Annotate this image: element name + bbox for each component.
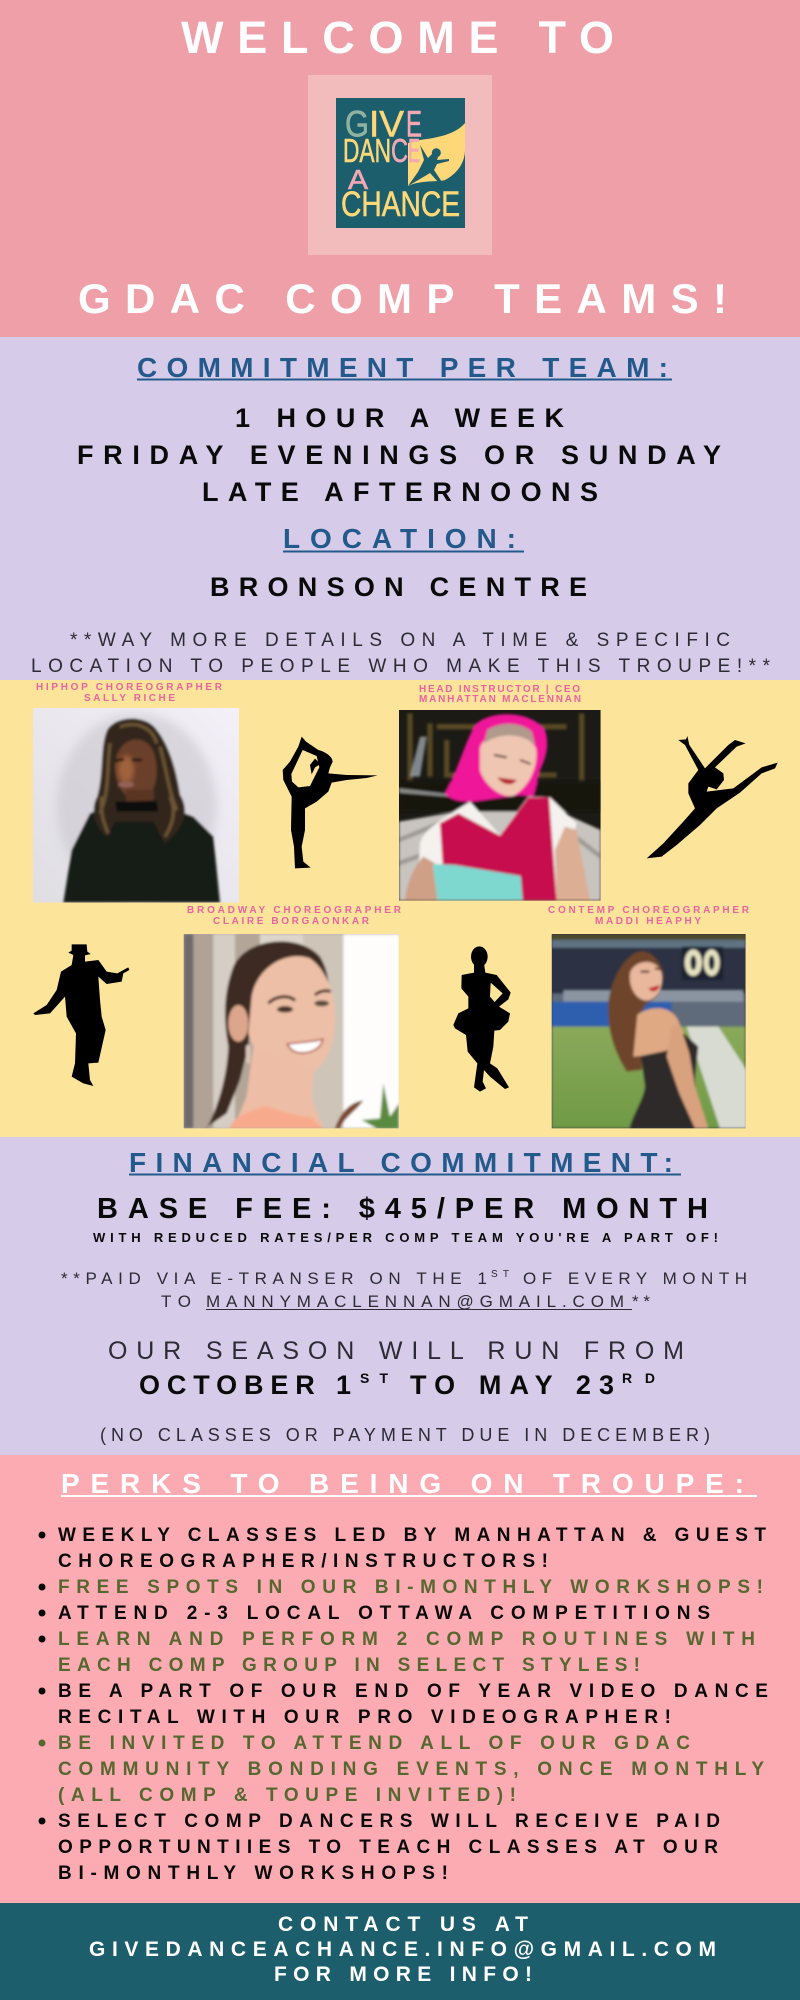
text: payment note xyxy=(61,1269,747,1311)
caption: maddi heaphy: MADDI HEAPHY xyxy=(595,916,701,927)
logo: give dance a chance: G xyxy=(345,104,369,144)
icon: dancer leaping xyxy=(647,736,778,858)
heading: perks to being on troupe: PERKS TO BEING ON TROUPE: xyxy=(61,1468,744,1499)
logo: give dance a chance: E xyxy=(408,132,420,169)
text: contact: FOR MORE INFO! xyxy=(274,1963,532,1986)
text: contact xyxy=(89,1913,716,1986)
text: season dates: RD xyxy=(622,1370,655,1386)
bullet: competitions: ATTEND 2-3 LOCAL OTTAWA COMPETITIONS xyxy=(58,1603,710,1624)
text: details note xyxy=(31,630,771,677)
heading: commitment per team: COMMITMENT PER TEAM: xyxy=(137,352,668,383)
logo: give dance a chance xyxy=(308,75,492,255)
caption: sally riche: SALLY RICHE xyxy=(84,693,175,704)
text: weekly commitment xyxy=(77,403,721,507)
caption: claire borgaonkar: CLAIRE BORGAONKAR xyxy=(213,916,370,927)
text: season dates: OCTOBER 1 xyxy=(139,1370,351,1400)
caption: maddi heaphy: CONTEMP CHOREOGRAPHER xyxy=(548,905,750,916)
heading: financial commitment: FINANCIAL COMMITMENT: xyxy=(129,1147,673,1178)
bullet: weekly classes xyxy=(38,1525,766,1572)
bullet: paid opportunities: BI-MONTHLY WORKSHOPS! xyxy=(58,1863,448,1884)
bullet: paid opportunities xyxy=(38,1811,720,1884)
text: payment note: ST xyxy=(491,1269,509,1280)
bullet: routines: EACH COMP GROUP IN SELECT STYLES! xyxy=(58,1655,640,1676)
icon: dancer with top hat xyxy=(33,944,129,1086)
bullet: weekly classes: WEEKLY CLASSES LED BY MANHATTAN & GUEST xyxy=(58,1525,766,1546)
text: season dates: ST xyxy=(360,1370,388,1386)
caption: sally riche: HIPHOP CHOREOGRAPHER xyxy=(36,682,223,693)
text: december note: (NO CLASSES OR PAYMENT DUE IN DECEMBER) xyxy=(100,1425,710,1445)
bullet: paid opportunities: OPPORTUNTIIES TO TEACH CLASSES AT OUR xyxy=(58,1837,718,1858)
panel: perks xyxy=(0,1455,800,1903)
text: details note: **WAY MORE DETAILS ON A TIME & SPECIFIC xyxy=(70,630,730,651)
bullet: video recital: BE A PART OF OUR END OF YEAR VIDEO DANCE xyxy=(58,1681,768,1702)
bullet: paid opportunities: SELECT COMP DANCERS WILL RECEIVE PAID xyxy=(58,1811,720,1832)
bullet: free spots: FREE SPOTS IN OUR BI-MONTHLY WORKSHOPS! xyxy=(58,1577,763,1598)
text: reduced rates: WITH REDUCED RATES/PER COMP TEAM YOU'RE A PART OF! xyxy=(93,1230,718,1245)
bullet: video recital xyxy=(38,1681,768,1728)
title: welcome to: WELCOME TO xyxy=(181,12,614,63)
panel: financial commitment xyxy=(0,1137,800,1455)
panel: welcome header xyxy=(0,0,800,337)
icon: ballet dancer xyxy=(453,946,511,1092)
text: payment note: TO xyxy=(161,1292,191,1311)
text: contact: GIVEDANCEACHANCE.INFO@GMAIL.COM xyxy=(89,1938,716,1961)
text: payment note: OF EVERY MONTH xyxy=(523,1269,747,1288)
text: weekly commitment: LATE AFTERNOONS xyxy=(202,477,598,507)
text: weekly commitment: 1 HOUR A WEEK xyxy=(235,403,564,433)
logo: give dance a chance: E xyxy=(406,104,422,144)
logo: give dance a chance: CHANCE xyxy=(341,185,460,224)
caption: manhattan maclennan xyxy=(419,684,581,705)
heading: location: LOCATION: xyxy=(283,523,516,554)
text: season dates xyxy=(108,1337,684,1400)
bullet: video recital: RECITAL WITH OUR PRO VIDEOGRAPHER! xyxy=(58,1707,671,1728)
photo: manhattan maclennan xyxy=(399,710,601,901)
caption: claire borgaonkar xyxy=(187,905,402,927)
bullet: routines xyxy=(38,1629,755,1676)
bullet: bonding events: BE INVITED TO ATTEND ALL OF OUR GDAC xyxy=(58,1733,690,1754)
text: season dates: TO MAY 23 xyxy=(410,1370,614,1400)
caption: manhattan maclennan: MANHATTAN MACLENNAN xyxy=(419,694,581,705)
text: details note: LOCATION TO PEOPLE WHO MAKE THIS TROUPE!** xyxy=(31,656,771,677)
caption: sally riche xyxy=(36,682,223,704)
panel: commitment and location xyxy=(0,337,800,680)
text: bronson centre: BRONSON CENTRE xyxy=(210,572,587,602)
text: payment note: ** xyxy=(632,1292,650,1311)
list: perks xyxy=(38,1525,768,1884)
icon: dancer standing bow pose xyxy=(283,737,378,868)
text: base fee: BASE FEE: $45/PER MONTH xyxy=(97,1193,708,1225)
bullet: bonding events: (ALL COMP & TOUPE INVITED)! xyxy=(58,1785,516,1806)
bullet: bonding events xyxy=(38,1733,764,1806)
text: payment note: MANNYMACLENNAN@GMAIL.COM xyxy=(206,1292,624,1311)
text: payment note: **PAID VIA E-TRANSER ON THE 1 xyxy=(61,1269,487,1288)
text: season dates: OUR SEASON WILL RUN FROM xyxy=(108,1337,684,1365)
bullet: bonding events: COMMUNITY BONDING EVENTS, ONCE MONTHLY xyxy=(58,1759,764,1780)
caption: manhattan maclennan: HEAD INSTRUCTOR | CEO xyxy=(419,684,580,695)
text: weekly commitment: FRIDAY EVENINGS OR SUNDAY xyxy=(77,440,721,470)
panel: contact footer xyxy=(0,1903,800,2000)
title: gdac comp teams: GDAC COMP TEAMS! xyxy=(78,275,727,322)
caption: maddi heaphy xyxy=(548,905,750,927)
panel: choreographers xyxy=(0,680,800,1137)
photo: sally riche xyxy=(33,708,239,903)
bullet: routines: LEARN AND PERFORM 2 COMP ROUTINES WITH xyxy=(58,1629,755,1650)
photo: maddi heaphy xyxy=(552,934,747,1128)
photo: claire borgaonkar xyxy=(184,934,400,1128)
text: contact: CONTACT US AT xyxy=(278,1913,528,1936)
caption: claire borgaonkar: BROADWAY CHOREOGRAPHER xyxy=(187,905,402,916)
logo: give dance a chance: IV xyxy=(369,104,404,144)
logo: give dance a chance: DAN xyxy=(343,132,391,169)
bullet: weekly classes: CHOREOGRAPHER/INSTRUCTORS! xyxy=(58,1551,548,1572)
logo: give dance a chance: C xyxy=(391,132,408,169)
logo: give dance a chance: A xyxy=(348,164,368,195)
